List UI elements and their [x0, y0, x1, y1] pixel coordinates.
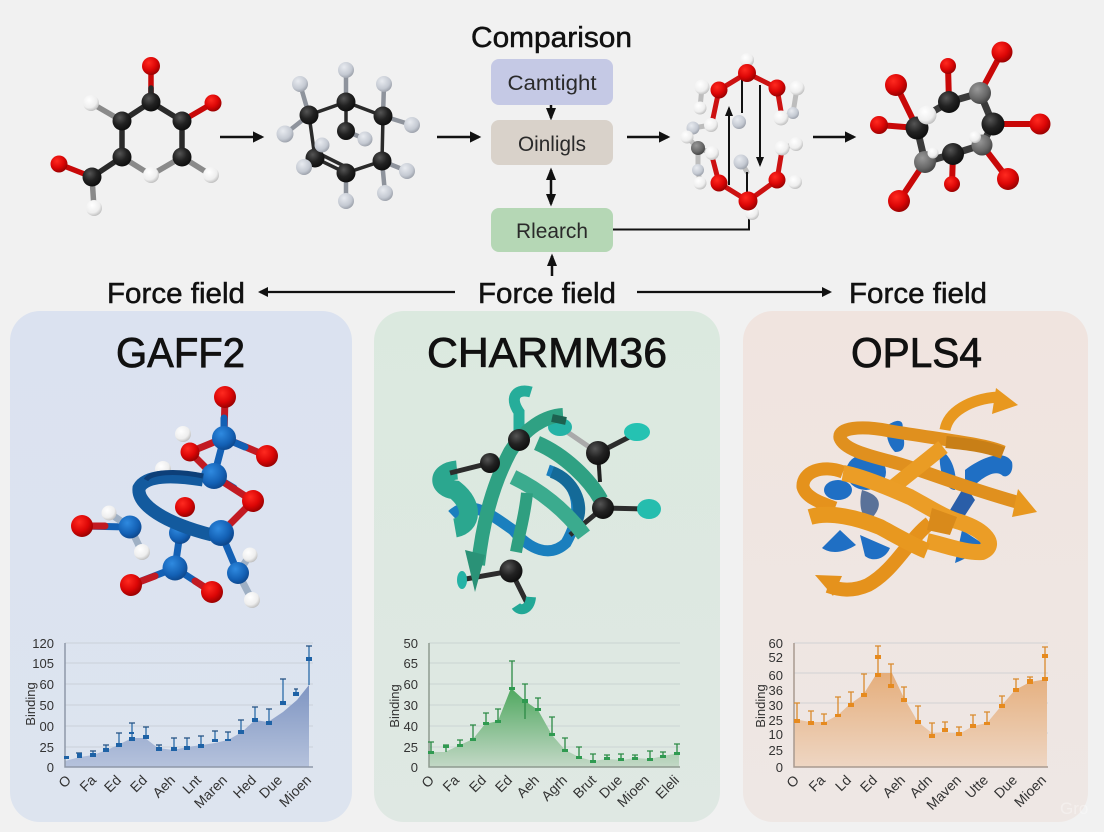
chart: GAFF2 binding: Binding [23, 682, 38, 726]
chart: OPLS4 binding: Ld [832, 772, 854, 794]
molecule: CHARMM36 ribbon [442, 391, 661, 609]
heading: GAFF2: GAFF2 [116, 329, 245, 376]
arrow: double headed [550, 170, 552, 204]
chart: OPLS4 binding: 0 [776, 760, 783, 775]
chart: OPLS4 binding: O [783, 772, 802, 791]
chart: GAFF2 binding: 120 [32, 636, 54, 651]
box: Camtight: Camtight [508, 72, 597, 95]
chart: OPLS4 binding: 10 [769, 727, 783, 742]
panel: OPLS4 [743, 311, 1088, 822]
chart: GAFF2 binding: Lnt [179, 772, 204, 797]
box: Oinligls [491, 120, 613, 165]
chart: CHARMM36 binding: 60 [404, 677, 418, 692]
chart: GAFF2 binding: Aeh [149, 772, 178, 801]
box: Oinligls: Oinligls [518, 133, 586, 156]
chart: CHARMM36 binding: Ed [466, 772, 489, 795]
arrow: step 4 [813, 136, 854, 138]
label: Force field right: Force field [849, 278, 987, 310]
chart: OPLS4 binding: Utte [962, 772, 991, 801]
chart: OPLS4 binding: Due [991, 772, 1020, 801]
chart: CHARMM36 binding: 0 [411, 760, 418, 775]
arrow: Camtight to Oinligls [550, 105, 552, 118]
chart: CHARMM36 binding: Due [596, 772, 625, 801]
chart: CHARMM36 binding: O [418, 772, 437, 791]
chart: GAFF2 binding: Ed [127, 772, 150, 795]
chart: GAFF2 binding: Hed [230, 772, 259, 801]
chart: OPLS4 binding [753, 636, 1049, 813]
panel: GAFF2 [10, 311, 352, 822]
chart: GAFF2 binding: 60 [40, 677, 54, 692]
chart: CHARMM36 binding: Agrh [538, 772, 570, 804]
chart: CHARMM36 binding: 40 [404, 719, 418, 734]
molecule 2: bridged cage [276, 62, 420, 209]
chart: GAFF2 binding [23, 636, 314, 811]
arrow: step 3 [627, 136, 668, 138]
chart: OPLS4 binding: 25 [769, 743, 783, 758]
chart: CHARMM36 binding: 25 [404, 740, 418, 755]
chart: CHARMM36 binding: Ed [492, 772, 515, 795]
arrow: up to Rlearch [551, 256, 553, 276]
molecule 1: ring with red oxygens [50, 57, 222, 216]
arrow: step 1 [220, 136, 262, 138]
chart: CHARMM36 binding: Binding [387, 684, 402, 728]
chart: OPLS4 binding: 36 [769, 683, 783, 698]
chart: GAFF2 binding: Fa [76, 772, 99, 795]
chart: OPLS4 binding: Fa [805, 772, 828, 795]
chart: GAFF2 binding: Maren [191, 772, 230, 811]
heading: CHARMM36: CHARMM36 [427, 329, 667, 376]
chart: CHARMM36 binding: 65 [404, 656, 418, 671]
chart: GAFF2 binding: 25 [40, 740, 54, 755]
chart: GAFF2 binding: Mioen [276, 772, 314, 810]
chart: OPLS4 binding: 30 [769, 698, 783, 713]
molecule: GAFF2 ball and stick [71, 386, 278, 608]
chart: OPLS4 binding: 25 [769, 713, 783, 728]
molecule: OPLS4 ribbon [803, 388, 1037, 596]
arrow: to right label [637, 291, 830, 293]
arrow: step 2 [437, 136, 479, 138]
chart: CHARMM36 binding: Aeh [513, 772, 542, 801]
chart: OPLS4 binding: Binding [753, 684, 768, 728]
chart: GAFF2 binding: 50 [40, 698, 54, 713]
chart: GAFF2 binding: O [55, 772, 74, 791]
chart: CHARMM36 binding: Brut [570, 772, 599, 801]
chart: GAFF2 binding: 0 [47, 760, 54, 775]
chart: OPLS4 binding: 60 [769, 636, 783, 651]
molecule 3: red open ring [680, 53, 804, 220]
chart: CHARMM36 binding: Fa [439, 772, 462, 795]
chart: GAFF2 binding: Due [256, 772, 285, 801]
box: Camtight [491, 59, 613, 105]
chart: CHARMM36 binding: Mioen [614, 772, 652, 810]
heading: OPLS4: OPLS4 [851, 329, 982, 376]
panel: CHARMM36 [374, 311, 720, 822]
chart: GAFF2 binding: Ed [101, 772, 124, 795]
chart: OPLS4 binding: 52 [769, 650, 783, 665]
arrow: to left label [260, 291, 455, 293]
box: Rlearch [491, 208, 613, 252]
label: Force field left: Force field [107, 278, 245, 310]
chart: OPLS4 binding: Adn [906, 772, 935, 801]
molecule 4: ring with many oxygens [870, 42, 1050, 212]
chart: OPLS4 binding: Aeh [879, 772, 908, 801]
chart: CHARMM36 binding [387, 636, 682, 810]
box: Rlearch: Rlearch [516, 220, 588, 243]
title: Comparison: Comparison [471, 22, 632, 54]
chart: CHARMM36 binding: 30 [404, 698, 418, 713]
arrow: connector Rlearch to molecule 3 [613, 205, 749, 230]
chart: OPLS4 binding: Ed [857, 772, 880, 795]
chart: GAFF2 binding: 105 [32, 656, 54, 671]
label: Force field centre: Force field [478, 278, 616, 310]
chart: CHARMM36 binding: 50 [404, 636, 418, 651]
chart: OPLS4 binding: 60 [769, 668, 783, 683]
chart: GAFF2 binding: 00 [40, 719, 54, 734]
chart: CHARMM36 binding: Eleli [652, 772, 682, 802]
watermark: Gro [1060, 799, 1088, 818]
chart: OPLS4 binding: Mioen [1011, 772, 1049, 810]
chart: OPLS4 binding: Maven [923, 772, 964, 813]
